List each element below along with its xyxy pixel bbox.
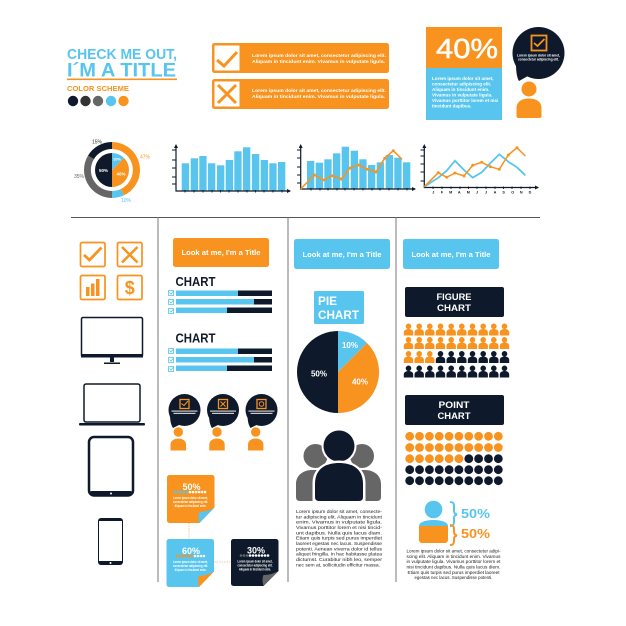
line chart: F	[441, 190, 444, 194]
bar group chart 1: CHART	[176, 275, 216, 289]
text block: column 4 body: Lorem ipsum dolor sit amet, consectetur adipi-	[406, 548, 501, 554]
donut chart: 15%	[92, 140, 103, 146]
heading: point chart	[405, 395, 504, 425]
check banner: Lorem ipsum dolor sit amet, consectetur adipiscing elit.	[252, 53, 386, 58]
color scheme swatches	[68, 96, 129, 106]
text block: column 4 body: Etiam quis turpis sed purus imperdiet laoreet	[408, 570, 500, 576]
note card 50%: Lorem ipsum dolor sit amet,	[173, 496, 208, 500]
note card 30%: 30%	[247, 546, 265, 556]
split percentage labels: 50%	[461, 506, 490, 521]
heading: point chart: CHART	[438, 411, 471, 421]
pie chart: 10%	[342, 341, 358, 350]
heading: column 2 title	[173, 238, 269, 267]
text block: column 3 body: tur adipiscing elit. Aliquam in tincidunt	[296, 514, 383, 520]
note card 50%: 50%	[182, 482, 201, 492]
check banner: Aliquam in tincidunt enim. Vivamus in vulputate ligula.	[252, 59, 385, 64]
heading: column 4 title: Look at me, I'm a Title	[412, 250, 490, 259]
icon: bar graph box	[80, 276, 105, 300]
donut chart: 40%	[116, 172, 126, 176]
note card 60%	[166, 539, 214, 587]
text block: column 3 body: Vivamus porttitor lorem et nisi tincid-	[296, 525, 382, 531]
speech bubble	[512, 27, 564, 81]
40% stat card	[426, 27, 502, 120]
speech bubble: Lorem ipsum dolor sit amet,	[517, 54, 560, 58]
line chart: O	[511, 190, 514, 194]
point chart	[405, 432, 503, 485]
check banner	[212, 43, 389, 73]
heading: column 2 title: Look at me, I'm a Title	[182, 248, 260, 257]
note card 60%: Aliquam in tincidunt enim.	[174, 568, 207, 572]
title block: CHECK ME OUT,	[67, 47, 177, 63]
text block: column 4 body: scing elit. Aliquam in tincidunt enim. Vivamus	[406, 554, 501, 560]
title block: COLOR SCHEME	[67, 84, 129, 93]
note card 30%	[231, 539, 278, 586]
note card 60%: 60%	[182, 546, 200, 556]
note card 30%: consectetur adipiscing elit.	[238, 564, 273, 568]
line chart: N	[520, 190, 523, 194]
bubble with person: cross	[207, 394, 239, 450]
text block: column 3 body: laoreet egestas nec lacus. Suspendisse	[296, 541, 382, 547]
note card 30%: Aliquam in tincidunt enim.	[239, 568, 271, 572]
icon: check box	[80, 242, 105, 266]
text block: column 3 body: nec sem at, sollicitudin efficitur massa.	[296, 562, 380, 568]
pie chart: 50%	[311, 370, 327, 378]
icon: phone	[98, 518, 123, 565]
figure chart	[404, 324, 509, 378]
note card 60%: consectetur adipiscing elit.	[173, 564, 208, 568]
note card 30%: Lorem ipsum dolor sit amet,	[238, 560, 273, 564]
note card 50%: Aliquam in tincidunt enim.	[174, 504, 207, 508]
40% stat card: Lorem ipsum dolor sit amet,	[432, 76, 494, 81]
line chart: J	[432, 190, 434, 194]
icon: laptop	[79, 384, 145, 426]
text block: column 4 body: in vulputate ligula. Vivamus porttitor lorem et	[406, 559, 501, 565]
icon: person	[516, 82, 542, 118]
title block: I´M A TITLE	[67, 60, 176, 82]
text block: column 4 body: nisi tincidunt dapibus. Nulla quis lacus diem.	[406, 564, 500, 570]
heading: column 3 title: Look at me, I'm a Title	[302, 250, 382, 259]
line chart: M	[467, 190, 470, 194]
heading: pie chart: PIE	[318, 294, 337, 308]
line chart: A	[458, 190, 461, 194]
icon: dollar box: $	[125, 278, 135, 298]
line chart: A	[494, 190, 497, 194]
heading: figure chart: CHART	[437, 303, 472, 313]
text block: column 3 body: potenti. Aenean viverra dolor id tellus	[296, 546, 383, 552]
text block: column 3 body	[296, 509, 383, 568]
40% stat card: tincidunt dapibus.	[432, 104, 472, 108]
cross banner	[212, 79, 389, 109]
text block: column 4 body: egestas nec lacus. Suspendisse potenti.	[414, 575, 492, 581]
bar group chart 1	[168, 275, 272, 314]
heading: pie chart	[314, 291, 364, 324]
donut chart: 10%	[113, 156, 121, 162]
column dividers	[71, 217, 540, 582]
note card 60%: Lorem ipsum dolor sit amet,	[173, 560, 208, 564]
bar chart 1	[172, 144, 291, 193]
text block: column 3 body: enim. Vivamus in vulputate ligula.	[296, 520, 382, 526]
40% stat card: Aliquam in tincidunt enim.	[432, 87, 489, 92]
combo chart	[297, 144, 416, 191]
heading: column 4 title	[403, 239, 499, 269]
line chart: D	[529, 190, 532, 194]
icon: dollar box	[118, 276, 142, 300]
donut chart	[74, 140, 151, 204]
pie chart	[297, 331, 379, 413]
note card 50%	[167, 475, 214, 523]
text block: column 3 body: dictumst. Curabitur nibh leo, semper	[296, 557, 382, 563]
text block: column 4 body	[406, 548, 501, 581]
title block	[67, 47, 177, 93]
40% stat card: Vivamus porttitor lorem et nisi	[432, 98, 498, 103]
heading: figure chart	[405, 287, 504, 317]
40% stat card: Vivamus in vulputate ligula.	[432, 92, 492, 98]
icon: half person split	[419, 501, 448, 543]
text block: column 3 body: unt dapibus. Nulla quis lacus diam.	[296, 530, 382, 536]
40% stat card: 40%	[436, 33, 498, 64]
text block: column 3 body: Lorem ipsum dolor sit amet, consecte-	[296, 509, 382, 515]
line chart: J	[476, 190, 478, 194]
heading: figure chart: FIGURE	[436, 292, 472, 302]
text block: column 3 body: aliquet fringilla. In hac habitasse platea	[296, 552, 382, 558]
cross banner: Lorem ipsum dolor sit amet, consectetur adipiscing elit.	[252, 88, 386, 93]
heading: point chart: POINT	[438, 400, 470, 410]
line chart	[420, 144, 539, 194]
speech bubble: consectetur adipiscing elit.	[518, 58, 559, 62]
heading: column 3 title	[294, 239, 390, 269]
donut chart: 47%	[140, 154, 151, 160]
note card 50%: consectetur adipiscing elit.	[173, 500, 208, 504]
icon: tablet	[89, 437, 133, 496]
split percentage labels: 50%	[461, 526, 490, 541]
connectors	[189, 523, 231, 562]
line chart: M	[449, 190, 452, 194]
donut chart: 50%	[99, 168, 108, 173]
donut chart: 35%	[74, 174, 85, 180]
cross banner: Aliquam in tincidunt enim. Vivamus in vulputate ligula.	[252, 94, 385, 99]
split percentage labels	[450, 502, 490, 545]
bubble with person: check	[168, 394, 200, 450]
line chart: J	[485, 190, 487, 194]
pie chart: 40%	[352, 378, 368, 386]
bar group chart 2	[168, 332, 272, 372]
bubble with person: target	[246, 394, 278, 450]
icon: monitor	[81, 318, 143, 364]
heading: pie chart: CHART	[318, 308, 360, 322]
40% stat card: consectetur adipiscing elit.	[432, 82, 491, 86]
line chart: S	[502, 190, 505, 194]
icon: cross box	[118, 242, 142, 266]
text block: column 3 body: Etiam quis turpis sed purus imperdiet	[296, 536, 383, 542]
bar group chart 2: CHART	[176, 332, 216, 346]
donut chart: 10%	[121, 198, 132, 204]
icon: people group	[296, 428, 381, 503]
